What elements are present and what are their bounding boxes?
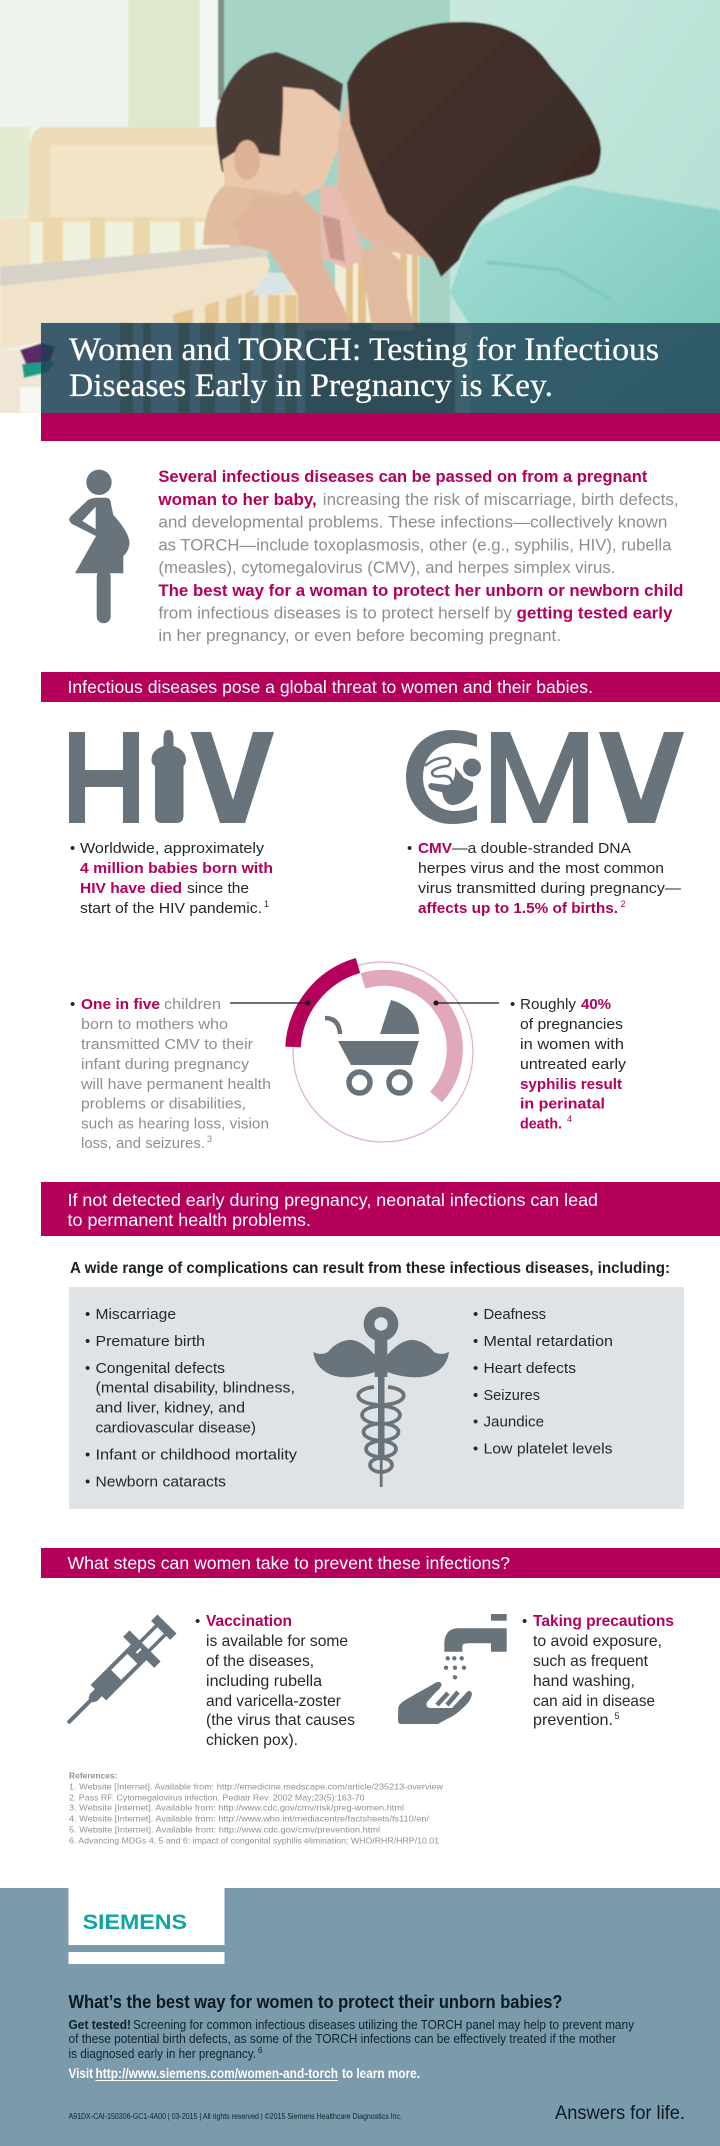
intro text: woman to her baby, (157, 490, 317, 509)
text: one in five: born to mothers who (81, 1016, 228, 1033)
list: left column: • (85, 1360, 90, 1377)
references: 1. Website [Internet]. Available from: http://emedicine.medscape.com/article/235213-overview (69, 1782, 444, 1792)
panel: complications list (69, 1287, 684, 1509)
text: vaccination: and varicella-zoster (206, 1693, 342, 1710)
list: right column: Low platelet levels (484, 1440, 612, 1458)
text: one in five: 3 (207, 1134, 212, 1144)
list: left column (85, 1306, 298, 1490)
text: CMV fact: —a double-stranded DNA (452, 840, 631, 857)
list: left column: • (85, 1333, 90, 1350)
footer heading: What’s the best way for women to protect their unborn babies? (68, 1991, 562, 2012)
title (69, 332, 659, 404)
list: right column: • (473, 1387, 478, 1404)
footer body text: Get tested! (68, 2017, 131, 2032)
text: HIV fact: start of the HIV pandemic. (80, 900, 262, 917)
intro text: and developmental problems. These infections—collectively known (158, 512, 667, 532)
intro text: getting tested early (516, 604, 673, 622)
text: CMV fact: herpes virus and the most common (418, 860, 664, 877)
tagline: Answers for life. (555, 2103, 685, 2124)
hero photo: mother kissing baby in crib (0, 0, 720, 430)
section banner: global threat (41, 672, 720, 702)
section banner: global threat: Infectious diseases pose a global threat to women and their babies. (68, 677, 593, 697)
text: CMV fact: affects up to 1.5% of births. (418, 900, 618, 917)
section banner: prevention (41, 1548, 720, 1578)
text: vaccination: • (195, 1613, 200, 1630)
visit link: to learn more. (342, 2066, 420, 2081)
icon: HIV lettering with bottle (69, 730, 274, 823)
references: 5. Website [Internet]. Available from: http://www.cdc.gov/cmv/prevention.html (69, 1824, 380, 1834)
text: syphilis fact: of pregnancies (520, 1016, 623, 1033)
text: syphilis fact (510, 996, 627, 1132)
title band (41, 323, 720, 413)
text: precautions: such as frequent (533, 1653, 649, 1670)
footer body text: Screening for common infectious diseases utilizing the TORCH panel may help to prevent many (133, 2017, 634, 2032)
intro text: increasing the risk of miscarriage, birth defects, (323, 490, 679, 509)
text: precautions: • (522, 1613, 527, 1630)
references: 2. Pass RF. Cytomegalovirus infection. Pediatr Rev. 2002 May;23(5):163-70 (69, 1792, 365, 1802)
logo: Siemens: SIEMENS (83, 1911, 187, 1934)
arc: one in five (293, 966, 358, 1047)
intro text: Several infectious diseases can be passed on from a pregnant (158, 467, 648, 486)
icon: syringe (52, 1608, 183, 1739)
chart: ring with stroller (230, 962, 499, 1142)
text: precautions: prevention. (533, 1712, 613, 1729)
text: syphilis fact: syphilis result (520, 1076, 622, 1093)
magenta band under title (41, 413, 720, 441)
text: HIV fact: since the (187, 880, 249, 897)
list: left column: Premature birth (96, 1333, 205, 1350)
text: one in five: children (164, 996, 221, 1013)
list: left column: • (85, 1474, 90, 1490)
text: CMV fact: • (407, 840, 412, 857)
text: syphilis fact: untreated early (520, 1056, 627, 1073)
text: one in five: will have permanent health (80, 1076, 271, 1093)
list: right column: Mental retardation (484, 1333, 613, 1350)
icon: pregnant woman (69, 470, 130, 623)
list: right column (473, 1306, 613, 1458)
text: vaccination: is available for some (206, 1633, 348, 1650)
section banner: permanent health problems (41, 1182, 720, 1236)
text: precautions (522, 1613, 674, 1729)
connector left (230, 1000, 310, 1006)
text: one in five: transmitted CMV to their (81, 1036, 253, 1053)
text: one in five (70, 996, 271, 1152)
text: HIV fact: HIV have died (80, 880, 182, 897)
visit link: Visit (68, 2066, 93, 2081)
footer body text: 6 (258, 2046, 263, 2055)
text: one in five: loss, and seizures. (81, 1135, 205, 1152)
text: CMV fact: virus transmitted during pregnancy— (418, 880, 681, 897)
list: left column: • (85, 1306, 90, 1323)
text: syphilis fact: death. (520, 1116, 562, 1132)
intro text: as TORCH—include toxoplasmosis, other (e.g., syphilis, HIV), rubella (158, 536, 672, 554)
icon: faucet and hand (398, 1614, 507, 1724)
text: precautions: to avoid exposure, (533, 1633, 662, 1650)
intro text: The best way for a woman to protect her unborn or newborn child (158, 581, 683, 600)
legal line: A91DX-CAI-150306-GC1-4A00 | 03-2015 | All rights reserved | ©2015 Siemens Healthcare Diagnostics Inc. (68, 2111, 402, 2121)
arc: 40 percent (363, 978, 455, 1097)
text: vaccination: (the virus that causes (206, 1712, 355, 1729)
intro text: (measles), cytomegalovirus (CMV), and herpes simplex virus. (158, 558, 615, 577)
references: References: (69, 1770, 118, 1780)
text: syphilis fact: 4 (567, 1114, 572, 1124)
footer panel (0, 1888, 720, 2146)
list: left column: Newborn cataracts (96, 1474, 226, 1490)
text: syphilis fact: 40% (581, 996, 611, 1013)
section banner: permanent health problems: to permanent health problems. (68, 1210, 311, 1230)
text: precautions: hand washing, (533, 1673, 635, 1690)
list: right column: Deafness (484, 1306, 546, 1323)
text: precautions: can aid in disease (533, 1693, 655, 1710)
text: vaccination: chicken pox). (206, 1732, 298, 1749)
footer body text: of these potential birth defects, as some of the TORCH infections can be effectively treated if the mother (68, 2031, 617, 2046)
text: one in five: such as hearing loss, vision (81, 1116, 269, 1132)
references: 4. Website [Internet]. Available from: http://www.who.int/mediacentre/factsheets/fs110/en/ (69, 1814, 430, 1824)
logo: Siemens (68, 1888, 224, 1964)
heading: complications: A wide range of complications can result from these infectious diseases, including: (70, 1260, 670, 1277)
connector right (434, 1000, 499, 1006)
text: syphilis fact: in women with (520, 1036, 624, 1053)
list: right column: • (473, 1333, 478, 1350)
list: right column: • (473, 1360, 478, 1377)
list: left column: cardiovascular disease) (96, 1420, 256, 1436)
text: one in five: infant during pregnancy (81, 1056, 250, 1073)
list: right column: • (473, 1440, 478, 1458)
text: CMV fact (407, 840, 681, 917)
list: right column: Heart defects (484, 1360, 576, 1377)
list: left column: and liver, kidney, and (96, 1400, 245, 1416)
intro text: from infectious diseases is to protect herself by (158, 604, 512, 622)
text: HIV fact: 4 million babies born with (80, 860, 273, 877)
icon: stroller (325, 1000, 419, 1093)
footer body text: is diagnosed early in her pregnancy. (68, 2046, 256, 2061)
icon: caduceus (313, 1307, 449, 1487)
text: syphilis fact: in perinatal (520, 1096, 605, 1112)
intro text (157, 467, 683, 645)
text: one in five: • (70, 996, 75, 1013)
text: syphilis fact: Roughly (520, 996, 576, 1013)
list: left column: (mental disability, blindness, (96, 1380, 295, 1396)
references: 3. Website [Internet]. Available from: http://www.cdc.gov/cmv/risk/preg-women.html (69, 1802, 404, 1812)
list: left column: • (85, 1446, 90, 1464)
title: Women and TORCH: Testing for Infectious (69, 332, 659, 368)
text: HIV fact: 1 (264, 899, 269, 909)
text: HIV fact: Worldwide, approximately (80, 840, 265, 857)
text: CMV fact: CMV (418, 840, 452, 857)
list: left column: Infant or childhood mortality (96, 1446, 298, 1464)
intro text: in her pregnancy, or even before becoming pregnant. (158, 626, 561, 645)
list: right column: • (473, 1414, 478, 1430)
list: left column: Congenital defects (96, 1360, 225, 1377)
section banner: prevention: What steps can women take to prevent these infections? (68, 1553, 510, 1573)
text: one in five: One in five (81, 996, 160, 1013)
icon: CMV lettering with fetus (406, 730, 684, 824)
text: CMV fact: 2 (620, 899, 626, 909)
text: precautions: Taking precautions (533, 1613, 674, 1630)
text: vaccination: including rubella (206, 1673, 322, 1690)
text: HIV fact (70, 840, 273, 917)
section banner: permanent health problems: If not detected early during pregnancy, neonatal infections can lead (68, 1190, 598, 1210)
list: right column: Seizures (484, 1387, 540, 1404)
title: Diseases Early in Pregnancy is Key. (69, 368, 553, 404)
text: HIV fact: • (70, 840, 75, 857)
text: vaccination: of the diseases, (206, 1653, 314, 1670)
visit link: http://www.siemens.com/women-and-torch (96, 2066, 338, 2081)
text: vaccination: Vaccination (206, 1613, 292, 1630)
footer body text (68, 2017, 634, 2061)
text: vaccination (195, 1613, 355, 1749)
list: right column: • (473, 1306, 478, 1323)
list: left column: Miscarriage (96, 1306, 176, 1323)
references: 6. Advancing MDGs 4, 5 and 6: impact of congenital syphilis elimination; WHO/RHR/HRP/10.01 (69, 1836, 439, 1846)
text: precautions: 5 (614, 1711, 620, 1721)
references (69, 1770, 444, 1846)
text: one in five: problems or disabilities, (81, 1096, 246, 1112)
list: right column: Jaundice (484, 1414, 544, 1430)
text: syphilis fact: • (510, 996, 515, 1013)
